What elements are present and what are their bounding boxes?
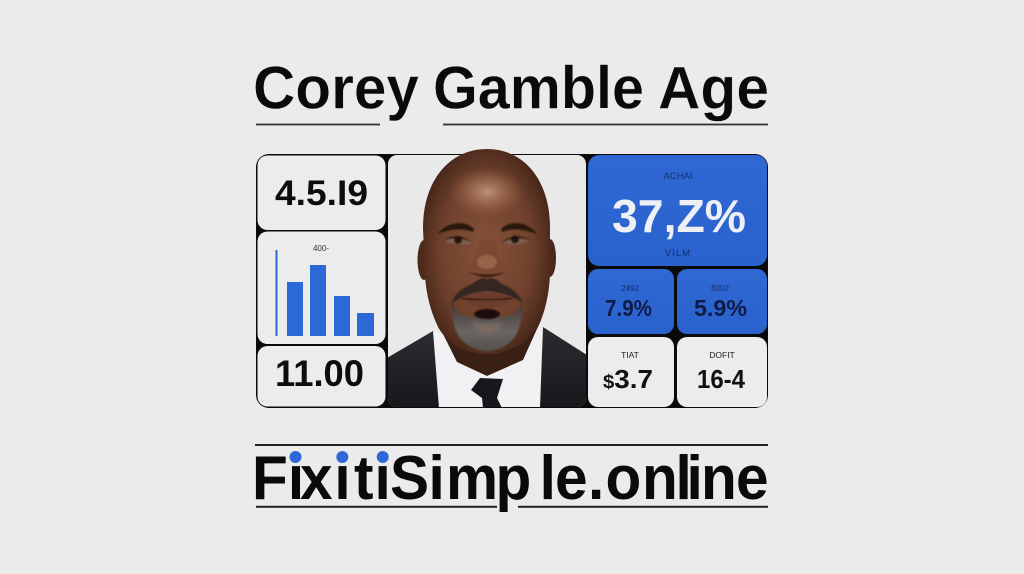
panel: white stat left [588,337,674,407]
portrait: ears [418,239,556,280]
panel: white stat right: 16-4 [697,364,745,394]
panel: white stat right [677,337,767,407]
footer brand: FixitiSimple.online [252,442,769,512]
panel: main blue stat: ACHAI [663,171,693,182]
portrait: mustache [451,278,523,304]
panel: white stat right: DOFIT [709,350,735,360]
panel: bottom-left stat: 11.00 [275,353,364,394]
title: Age [658,54,769,122]
portrait: forehead highlight [449,167,525,217]
panel: blue stat left: 7.9% [605,295,652,321]
portrait: goatee [452,302,522,351]
panel: bar chart [258,232,386,344]
portrait: head [423,149,550,354]
panel: portrait photo [387,149,587,408]
panel: main blue stat: VILM [665,248,691,259]
icon: blue i dots [290,451,389,463]
panel: bottom-left stat [258,346,386,406]
portrait: eyebrows [437,223,537,234]
panel: top-left stat [258,156,386,230]
panel: top-left stat: 4.5.I9 [275,174,368,213]
portrait: chin skin [472,322,502,334]
panel: bar chart: 400- [313,244,329,253]
portrait: eyes [443,236,531,245]
portrait: mouth line [462,298,512,300]
panel: blue stat right: 6002 [711,284,729,293]
panel: blue stat left [588,269,674,334]
portrait: soul patch [474,309,500,319]
panel: blue stat right: 5.9% [694,295,747,321]
panel: blue stat right [677,269,767,334]
panel: white stat left: TIAT [621,350,639,360]
title [253,54,769,125]
portrait: nose [468,240,506,278]
title: Corey [253,54,420,122]
panel: white stat left: $3.7 [603,364,653,394]
portrait: lips [461,292,513,309]
dashboard grid [256,149,768,408]
panel: main blue stat [588,155,767,266]
panel: blue stat left: 2492 [621,284,639,293]
panel: main blue stat: 37,Z% [612,190,746,242]
title: Gamble [433,54,644,122]
